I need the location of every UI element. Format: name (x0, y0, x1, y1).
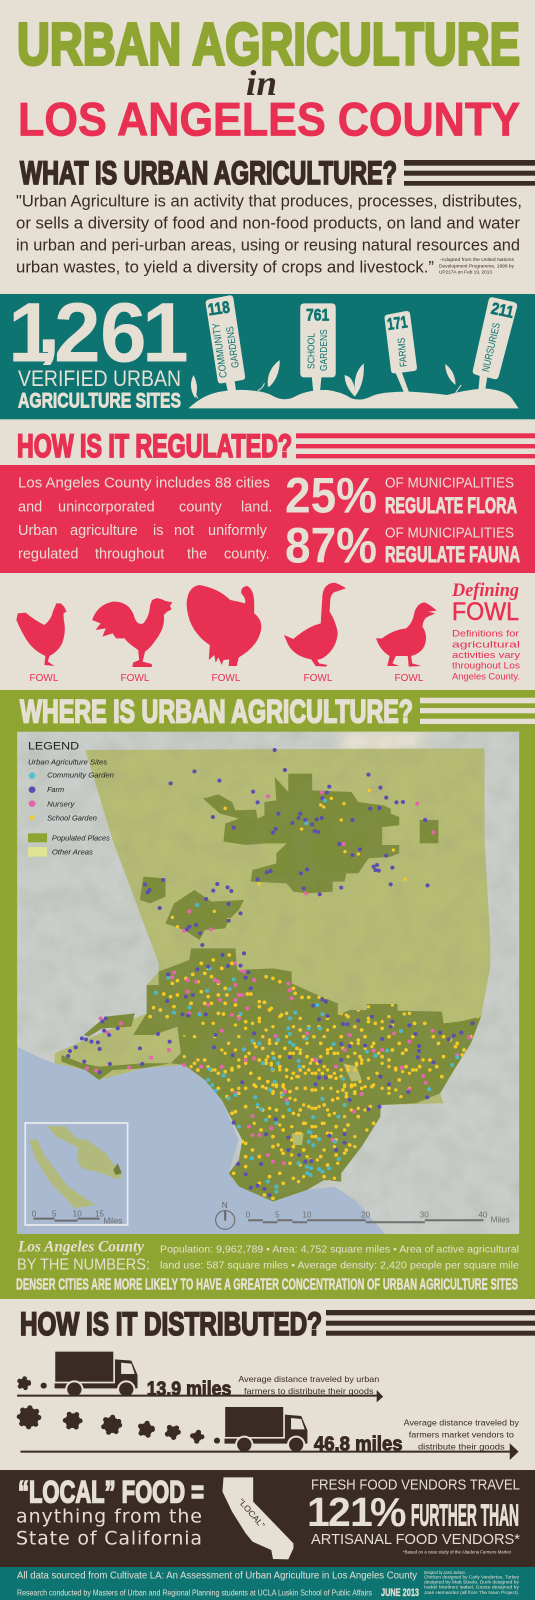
definition quote: UP217A on Feb 19, 2013 (439, 270, 492, 274)
regulation text (18, 476, 272, 562)
title (17, 12, 520, 146)
vendors stat: ARTISANAL FOOD VENDORS* (311, 1531, 520, 1548)
regulation text: Urban (18, 523, 58, 539)
total count: 1261 (8, 286, 189, 380)
footer: JUNE 2013 (381, 1587, 419, 1599)
icon: duck (376, 602, 437, 667)
regulation text: unincorporated (58, 500, 155, 516)
map scale bar (246, 1212, 510, 1224)
sign labels: GARDENS (225, 325, 242, 368)
stat: flora: 25% (285, 468, 377, 524)
defining fowl note: Definitions for (452, 629, 519, 640)
local food definition: “LOCAL” FOOD = (18, 1474, 204, 1510)
icon: hen (16, 603, 67, 666)
inset map: islands: 10 (73, 1210, 82, 1219)
definition quote: or sells a diversity of food and non-food products, on land and water (16, 215, 521, 233)
icon: california (222, 1477, 293, 1559)
map scale bar: Miles (491, 1216, 510, 1225)
fowl labels: FOWL (212, 673, 241, 684)
farmers market truck: distribute their goods (418, 1442, 505, 1452)
regulation text: is (153, 523, 163, 539)
sign labels: COMMUNITY (211, 322, 230, 378)
stat: flora: OF MUNICIPALITIES (385, 474, 514, 491)
icon: turkey (187, 585, 261, 666)
total count: , (37, 276, 60, 370)
title: in (246, 63, 277, 103)
farmers market truck: Average distance traveled by (404, 1418, 520, 1428)
inset map: islands: 0 (32, 1210, 37, 1219)
vendors stat (307, 1476, 520, 1554)
by the numbers: Los Angeles County (17, 1239, 145, 1256)
vendors stat: *Based on a case study of the Altadena Farmers Market (403, 1549, 512, 1554)
sign labels: 171 (386, 313, 409, 334)
total count: AGRICULTURE SITES (18, 388, 181, 412)
inset map: islands (25, 1123, 128, 1225)
heading: how is it distributed: HOW IS IT DISTRIBUTED? (20, 1306, 322, 1342)
map scale bar: 0 (246, 1210, 251, 1219)
defining fowl note: activities vary (452, 650, 520, 661)
panel: where is urban agriculture (0, 690, 535, 1299)
defining fowl note: Angeles County. (452, 671, 520, 682)
footer (0, 1567, 535, 1600)
footer: Isabel Martinez Isabel, Goose designed by (424, 1584, 520, 1590)
map legend: Nursery (47, 799, 76, 808)
other areas (55, 748, 490, 1140)
populated places (61, 774, 481, 1202)
by the numbers: Population: 9,962,789 • Area: 4,752 square miles • Area of active agricultural (160, 1244, 519, 1256)
icon: rooster (92, 598, 172, 667)
urban farmer truck: 13.9 miles (147, 1378, 231, 1400)
footer: José Hernandez (all from The Noun Project). (424, 1590, 519, 1596)
panel: defining fowl (16, 580, 520, 684)
definition quote: Development Programme, 1996 by (439, 264, 515, 268)
regulation text: the (187, 546, 207, 562)
definition quote: urban wastes, to yield a diversity of crops and livestock.” (16, 259, 434, 277)
north arrow: N (222, 1201, 228, 1210)
fowl labels (30, 673, 424, 684)
site dots: nurseries outer (87, 793, 433, 1071)
map legend: LEGEND (28, 740, 79, 752)
local food definition: State of California (16, 1527, 202, 1549)
stat: fauna: OF MUNICIPALITIES (385, 525, 514, 542)
garden signs illustration (188, 295, 519, 408)
map scale bar: 5 (275, 1210, 280, 1219)
ocean (17, 1047, 386, 1234)
regulation text: uniformly (208, 523, 268, 539)
local food definition: anything from the (16, 1505, 202, 1527)
map scale bar: 20 (361, 1210, 371, 1219)
stat: fauna: 87% (285, 518, 377, 574)
farmers market truck: farmers market vendors to (409, 1430, 514, 1440)
by the numbers: land use: 587 square miles • Average density: 2,420 people per square mile (160, 1259, 519, 1271)
map legend: School Garden (47, 814, 97, 823)
fowl labels: FOWL (395, 673, 424, 684)
sign labels: 211 (489, 299, 515, 322)
icon: goose (284, 583, 346, 667)
regulation text: Los Angeles County includes 88 cities (18, 476, 270, 492)
map legend: Farm (47, 785, 65, 794)
sign labels (207, 298, 515, 378)
panel: regulation (0, 465, 535, 574)
fowl labels: FOWL (30, 673, 59, 684)
defining fowl note: throughout Los (452, 661, 520, 672)
defining fowl note: FOWL (452, 598, 519, 626)
icon: california: “LOCAL” (236, 1497, 267, 1530)
regulation text: throughout (95, 546, 164, 562)
stat: flora (285, 468, 517, 524)
distribution chart (17, 1352, 520, 1460)
urban farmer truck: Average distance traveled by urban (238, 1374, 379, 1384)
map (17, 728, 519, 1234)
map legend: Other Areas (52, 848, 93, 857)
local food definition (16, 1474, 204, 1549)
map legend: Urban Agriculture Sites (28, 758, 107, 767)
heading: what is urban agriculture: WHAT IS URBAN AGRICULTURE? (20, 155, 397, 191)
regulation text: county. (224, 546, 270, 562)
farmers market truck: 46.8 miles (314, 1433, 403, 1456)
site dots: school gardens outer (172, 790, 405, 927)
map legend (28, 740, 114, 857)
site dots: community gardens outer (197, 801, 325, 905)
map scale bar: 30 (420, 1210, 429, 1219)
sign labels: NURSURIES (481, 322, 503, 373)
vendors stat: 121% (307, 1489, 406, 1535)
definition quote (16, 193, 522, 277)
map legend: Populated Places (52, 833, 110, 842)
total count (8, 276, 189, 412)
by the numbers (16, 1239, 519, 1293)
footer: Research conducted by Masters of Urban and Regional Planning students at UCLA Luskin School of Public Affairs (17, 1588, 372, 1598)
regulation text: land. (241, 500, 272, 516)
regulation text: and (18, 500, 42, 516)
regulation text: county (179, 500, 222, 516)
regulation text: agriculture (70, 523, 138, 539)
sign labels: SCHOOL (306, 333, 318, 369)
definition quote: in urban and peri-urban areas, using or reusing natural resources and (16, 237, 520, 255)
inset map: islands: 5 (52, 1210, 57, 1219)
footer: All data sourced from Cultivate LA: An Assessment of Urban Agriculture in Los Angeles County (17, 1570, 418, 1582)
farmers market truck (19, 1407, 520, 1460)
footer: Chicken designed by Carly Vandertoe, Turkey (424, 1574, 520, 1580)
regulation text: regulated (18, 546, 78, 562)
defining fowl note: agricultural (452, 639, 520, 650)
defining fowl note (451, 580, 520, 682)
panel: local food (0, 1470, 535, 1567)
fowl labels: FOWL (304, 673, 333, 684)
inset map: islands: 15 (95, 1210, 104, 1219)
heading: how is it regulated: HOW IS IT REGULATED? (17, 428, 292, 464)
sign labels: FARMS (396, 337, 410, 367)
inset map: islands: Miles (103, 1216, 122, 1225)
sign labels: 761 (306, 306, 329, 325)
footer: Designed by Juomi Jackson. (424, 1570, 466, 1576)
defining fowl note: Defining (451, 580, 519, 601)
sign labels: 118 (207, 298, 231, 319)
north arrow (216, 1201, 235, 1229)
definition quote: -Adapted from the United Nations (440, 257, 515, 262)
site dots: dense clusters (150, 955, 478, 1198)
definition quote: "Urban Agriculture is an activity that produces, processes, distributes, (16, 193, 522, 211)
urban farmer truck: farmers to distribute their goods (244, 1386, 374, 1396)
fowl labels: FOWL (121, 673, 150, 684)
sign labels: GARDENS (319, 329, 330, 371)
by the numbers: BY THE NUMBERS: (17, 1256, 150, 1273)
regulation text: not (174, 523, 194, 539)
stat: fauna (285, 518, 520, 574)
footer: designed by Matt Steele, Duck designed by (424, 1580, 520, 1586)
total count: VERIFIED URBAN (18, 366, 181, 391)
panel: verified sites (0, 276, 535, 419)
urban farmer truck (17, 1352, 383, 1402)
map scale bar: 10 (302, 1210, 312, 1219)
map legend: Community Garden (47, 771, 114, 780)
map scale bar: 40 (478, 1210, 488, 1219)
site dots: farms (68, 750, 473, 1195)
